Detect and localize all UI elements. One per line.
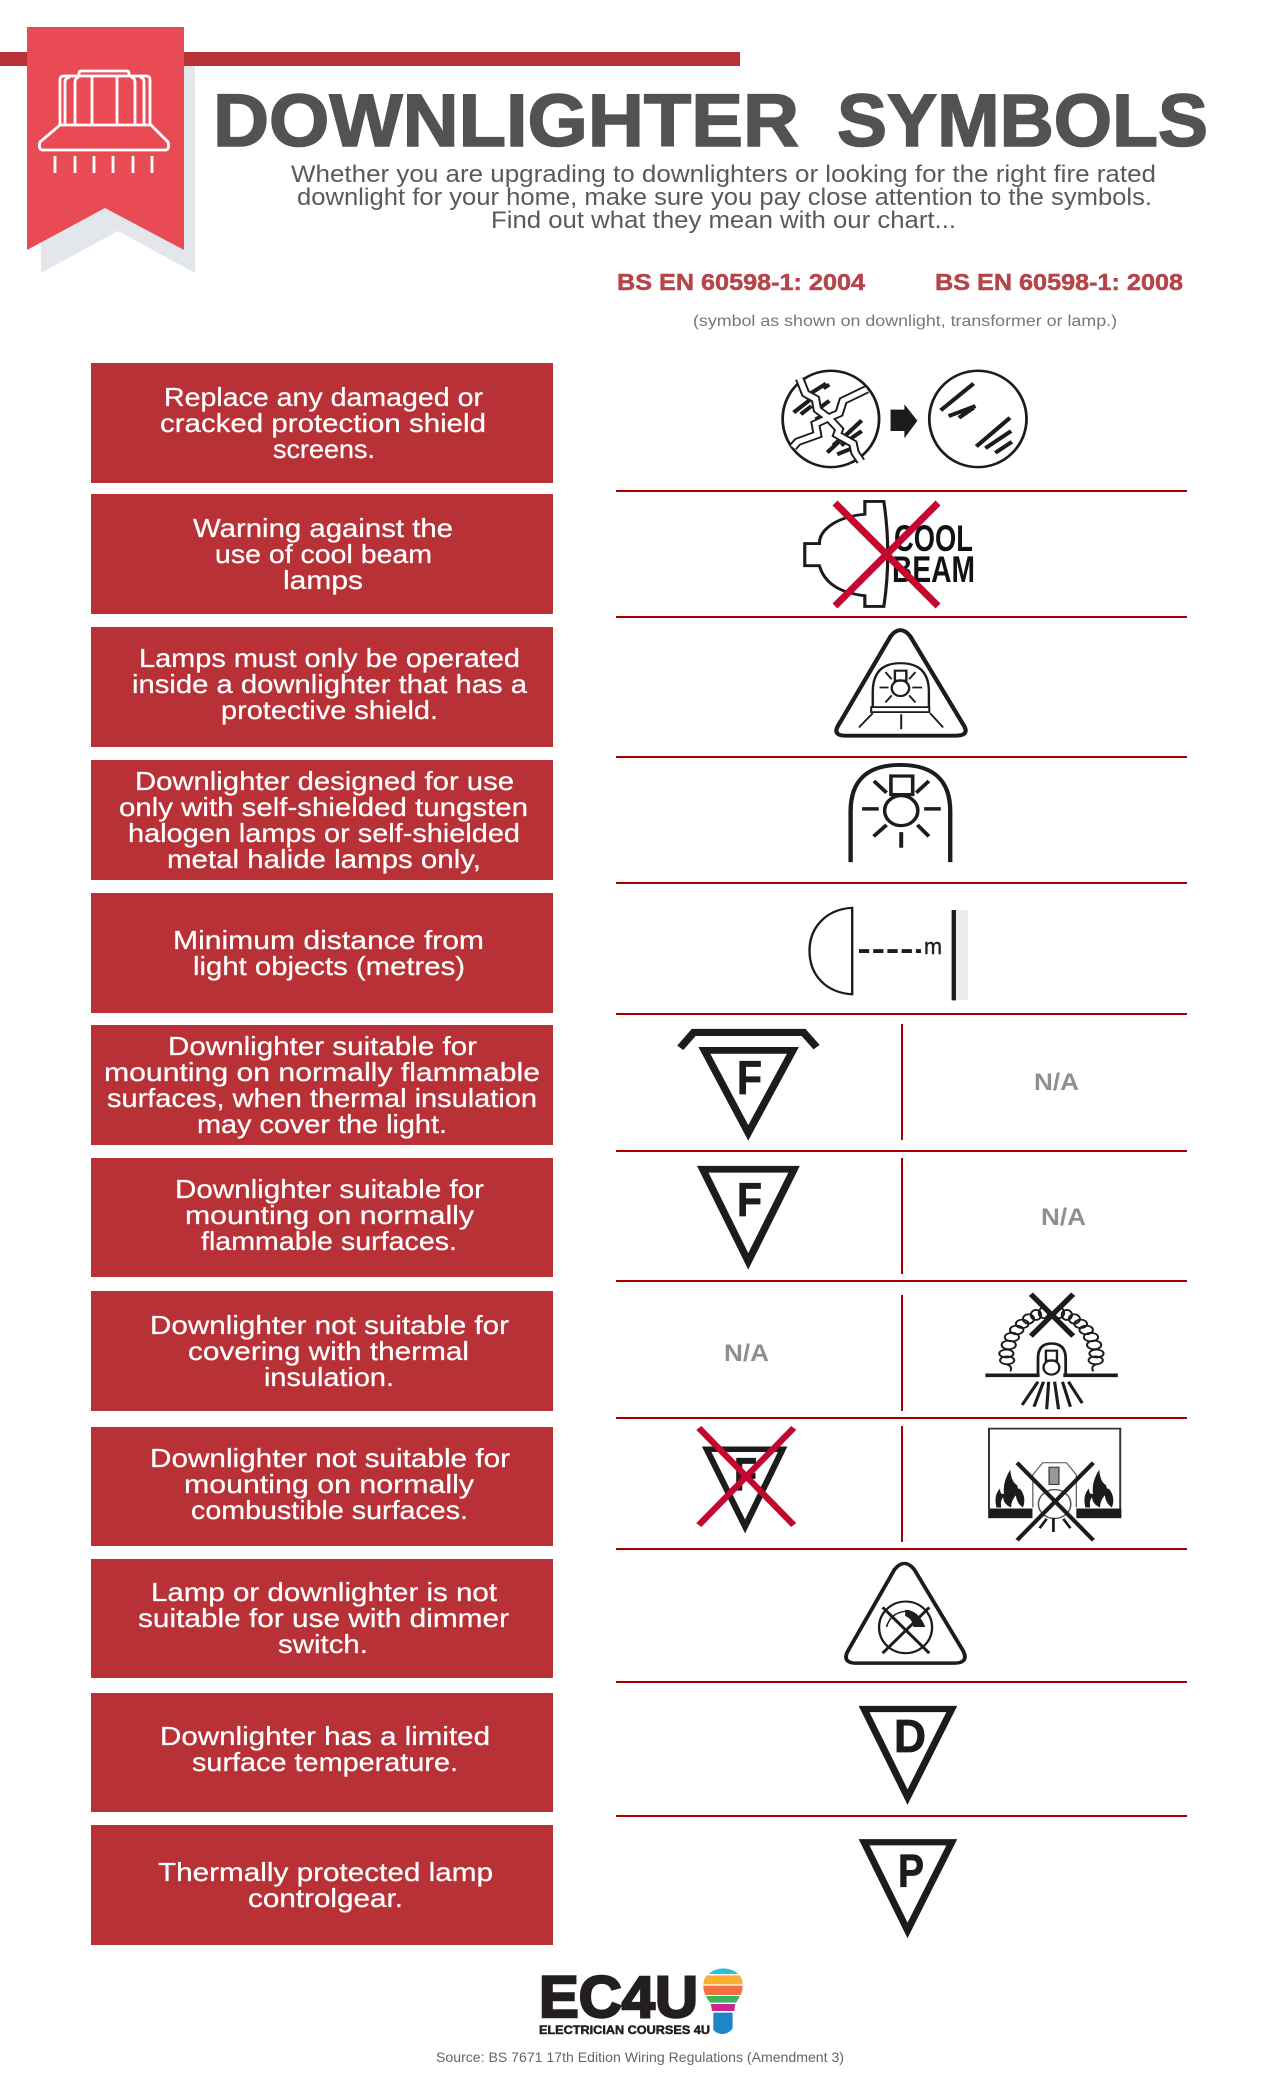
panel: protective shield [91, 627, 553, 747]
panel: cool beam [91, 494, 553, 614]
icon: downlight [39, 71, 169, 173]
panel: no insulation: Downlighter not suitable for [150, 1310, 509, 1340]
N/A 2004 row 8: N/A [724, 1340, 769, 1367]
icon: F symbol: F [737, 1173, 762, 1226]
panel: minimum distance: light objects (metres) [193, 951, 465, 981]
subtitle [291, 161, 1156, 234]
N/A 2008 row 7: N/A [1041, 1204, 1086, 1231]
panel: flammable surfaces: mounting on normally [185, 1200, 474, 1230]
panel: no dimmer [91, 1559, 553, 1678]
icon: not for combustible surfaces [988, 1429, 1121, 1540]
panel: cool beam: lamps [283, 565, 363, 595]
panel: minimum distance [91, 893, 553, 1013]
icon: F with cover symbol: F [737, 1051, 762, 1104]
panel: flammable with insulation: may cover the light. [197, 1109, 447, 1139]
panel: no insulation: insulation. [264, 1362, 394, 1392]
panel: thermally protected [91, 1825, 553, 1945]
icon: F with cover symbol [680, 1032, 817, 1133]
panel: not combustible: mounting on normally [184, 1469, 474, 1499]
icon: P triangle: P [898, 1845, 924, 1897]
panel: replace shield: Replace any damaged or [164, 382, 483, 412]
icon: D triangle [864, 1709, 952, 1797]
icon: no cool beam lamps: COOL [894, 518, 973, 559]
title: SYMBOLS [837, 79, 1208, 162]
subtitle: Find out what they mean with our chart... [491, 207, 956, 234]
panel: protective shield: Lamps must only be operated [139, 643, 520, 673]
panel: replace shield: cracked protection shield [160, 408, 486, 438]
panel: no insulation: covering with thermal [188, 1336, 469, 1366]
panel: flammable with insulation: surfaces, when thermal insulation [107, 1083, 537, 1113]
icon: self-shielded lamp [851, 765, 950, 862]
icon: no cool beam lamps [805, 501, 975, 606]
panel: not combustible: combustible surfaces. [191, 1495, 468, 1525]
panel: self-shielded lamps: Downlighter designed for use [135, 766, 514, 796]
subtitle: Whether you are upgrading to downlighters or looking for the right fire rated [291, 161, 1156, 188]
panel: protective shield: inside a downlighter that has a [132, 669, 528, 699]
subtitle: downlight for your home, make sure you pay close attention to the symbols. [297, 184, 1152, 211]
icon: F symbol [703, 1169, 794, 1261]
icon: no cool beam lamps: BEAM [892, 549, 975, 590]
panel: cool beam: use of cool beam [215, 539, 432, 569]
panel: replace shield [91, 363, 553, 483]
column headings: BS EN 60598-1: 2008 [935, 269, 1183, 295]
column headings [617, 269, 1183, 295]
panel: flammable with insulation: Downlighter suitable for [168, 1031, 477, 1061]
title [213, 79, 1208, 162]
icon: struck F symbol [699, 1428, 794, 1526]
icon: rainbow bulb [703, 1968, 743, 2034]
logo: EC4U: EC4U [539, 1965, 698, 2030]
panel: no insulation [91, 1291, 553, 1411]
column note: (symbol as shown on downlight, transformer or lamp.) [693, 313, 1117, 330]
panel: self-shielded lamps: halogen lamps or self-shielded [128, 818, 520, 848]
panel: no dimmer: switch. [278, 1629, 368, 1659]
icon: minimum distance: m [924, 934, 942, 959]
panel: thermally protected: Thermally protected lamp [158, 1857, 493, 1887]
logo: EC4U: ELECTRICIAN COURSES 4U [539, 2023, 710, 2037]
panel: surface temperature: Downlighter has a limited [160, 1721, 490, 1751]
icon: minimum distance [810, 908, 968, 1000]
icon: struck F symbol: F [734, 1448, 757, 1500]
panel: cool beam: Warning against the [193, 513, 453, 543]
icon: D triangle: D [894, 1710, 926, 1762]
panel: not combustible [91, 1427, 553, 1546]
panel: flammable with insulation [91, 1025, 553, 1145]
source note: Source: BS 7671 17th Edition Wiring Regulations (Amendment 3) [436, 2049, 844, 2065]
panel: not combustible: Downlighter not suitable for [150, 1443, 510, 1473]
column headings: BS EN 60598-1: 2004 [617, 269, 865, 295]
N/A 2008 row 6: N/A [1034, 1069, 1079, 1096]
panel: flammable with insulation: mounting on normally flammable [104, 1057, 540, 1087]
icon: P triangle [864, 1842, 952, 1930]
icon: no dimmer triangle [846, 1563, 965, 1663]
panel: thermally protected: controlgear. [248, 1883, 403, 1913]
panel: self-shielded lamps [91, 760, 553, 880]
header banner [0, 27, 740, 273]
icon: protective shield triangle [836, 630, 966, 736]
panel: surface temperature: surface temperature. [192, 1747, 458, 1777]
panel: flammable surfaces [91, 1158, 553, 1277]
panel: flammable surfaces: Downlighter suitable for [175, 1174, 484, 1204]
description panels [91, 363, 553, 1945]
logo: EC4U [539, 1965, 743, 2037]
panel: self-shielded lamps: only with self-shielded tungsten [119, 792, 528, 822]
panel: no dimmer: suitable for use with dimmer [138, 1603, 509, 1633]
panel: flammable surfaces: flammable surfaces. [201, 1226, 457, 1256]
panel: no dimmer: Lamp or downlighter is not [151, 1577, 498, 1607]
panel: self-shielded lamps: metal halide lamps only, [167, 844, 481, 874]
panel: minimum distance: Minimum distance from [173, 925, 484, 955]
panel: surface temperature [91, 1693, 553, 1812]
title: DOWNLIGHTER [213, 79, 799, 162]
icon: not for thermal insulation [985, 1294, 1118, 1409]
panel: protective shield: protective shield. [221, 695, 438, 725]
icon: cracked shield to new shield [783, 371, 1027, 467]
panel: replace shield: screens. [273, 434, 375, 464]
